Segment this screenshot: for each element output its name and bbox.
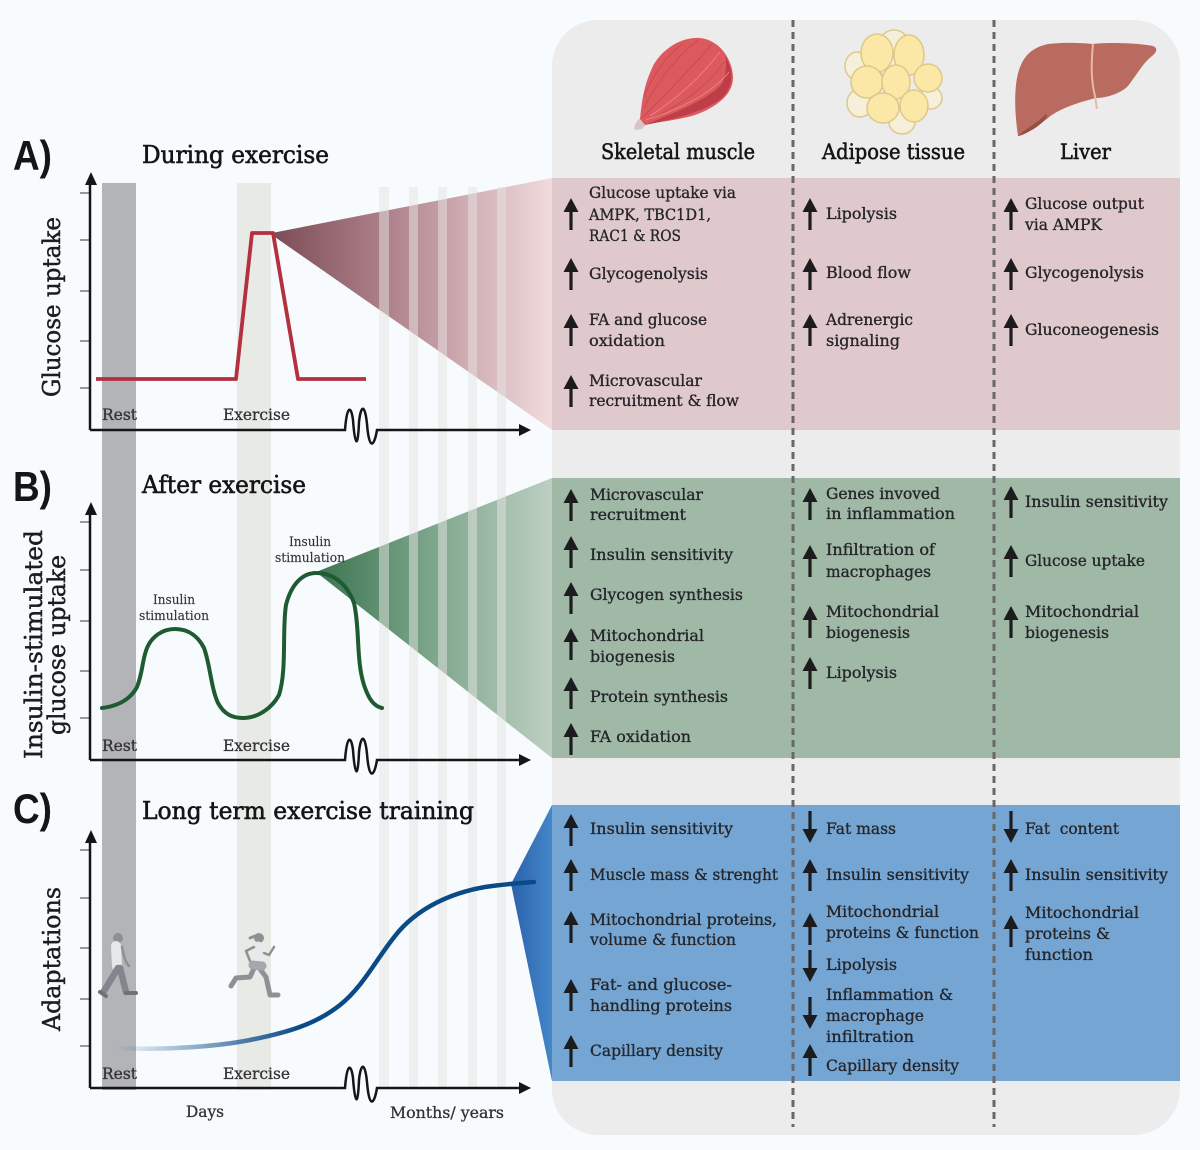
chart B: insulin-stimulated glucose uptake: glucose uptake xyxy=(43,555,71,735)
panel: long term, skeletal muscle: Insulin sensitivity xyxy=(590,819,733,838)
zoom cone: long term training xyxy=(511,805,552,1081)
panel: after exercise, liver: biogenesis xyxy=(1025,623,1109,642)
panel: tissue table background xyxy=(552,20,1180,1135)
panel: long term, skeletal muscle: Muscle mass & strenght xyxy=(590,865,779,884)
panel: during exercise, skeletal muscle: RAC1 & ROS xyxy=(589,226,681,245)
panel: during exercise, liver xyxy=(1004,194,1159,346)
panel: during exercise, adipose tissue: Adrenergic xyxy=(825,310,913,329)
chart B: insulin-stimulated glucose uptake: Insulin-stimulated xyxy=(20,530,48,759)
panel: after exercise, skeletal muscle: Mitochondrial xyxy=(590,626,704,645)
panel: during exercise, adipose tissue: Lipolysis xyxy=(826,204,897,223)
panel: after exercise, skeletal muscle xyxy=(564,485,743,755)
icon: adipose tissue xyxy=(845,30,942,134)
panel: during exercise, skeletal muscle: recruitment & flow xyxy=(589,391,739,410)
zoom cone: during exercise xyxy=(272,178,552,430)
exercise column xyxy=(237,183,271,1090)
panel: during exercise, liver: Gluconeogenesis xyxy=(1025,320,1159,339)
panel letter B: B) xyxy=(13,463,52,510)
panel: during exercise, skeletal muscle: Microvascular xyxy=(589,371,702,390)
title: during exercise: During exercise xyxy=(142,141,329,169)
panel: after exercise, adipose tissue: Infiltration of xyxy=(826,540,936,559)
icon: running person xyxy=(231,933,278,995)
panel: during exercise, skeletal muscle: AMPK, TBC1D1, xyxy=(588,205,711,224)
panel: long term, skeletal muscle: Capillary density xyxy=(590,1041,723,1060)
panel: during exercise, adipose tissue: Blood flow xyxy=(826,263,911,282)
band: during exercise xyxy=(552,178,1180,430)
panel: during exercise, adipose tissue xyxy=(802,198,913,350)
heading: skeletal muscle: Skeletal muscle xyxy=(601,140,755,164)
chart C: adaptations over time: Adaptations xyxy=(38,887,66,1032)
panel: long term, skeletal muscle xyxy=(564,814,779,1067)
panel: after exercise, adipose tissue: Lipolysis xyxy=(826,663,897,682)
icon: walking person xyxy=(100,933,136,996)
chart A: glucose uptake during exercise: Rest xyxy=(102,405,138,424)
chart C: adaptations over time xyxy=(38,830,534,1122)
panel: after exercise, skeletal muscle: Insulin sensitivity xyxy=(590,545,733,564)
panel: during exercise, skeletal muscle: oxidation xyxy=(589,331,665,350)
chart B: insulin-stimulated glucose uptake xyxy=(20,502,531,774)
panel: after exercise, adipose tissue xyxy=(802,484,955,689)
title: after exercise: After exercise xyxy=(141,471,306,499)
title: long term exercise training: Long term exercise training xyxy=(142,797,474,825)
panel: during exercise, skeletal muscle xyxy=(564,183,739,410)
chart A: glucose uptake during exercise: Glucose uptake xyxy=(38,217,66,397)
chart B: insulin-stimulated glucose uptake: stimulation xyxy=(139,609,210,624)
chart C: adaptations over time: Exercise xyxy=(223,1064,290,1083)
panel: during exercise, adipose tissue: signaling xyxy=(826,331,900,350)
panel: long term, liver: Fat content xyxy=(1025,819,1120,838)
chart B: insulin-stimulated glucose uptake: Exercise xyxy=(223,736,290,755)
chart B: insulin-stimulated glucose uptake: stimulation xyxy=(275,551,346,566)
panel letter A: A) xyxy=(13,132,52,179)
chart B: insulin-stimulated glucose uptake: Rest xyxy=(102,736,138,755)
zoom cone: after exercise xyxy=(316,478,552,758)
panel: long term, adipose tissue xyxy=(802,811,979,1076)
panel: after exercise, adipose tissue: macrophages xyxy=(826,562,931,581)
panel: after exercise, skeletal muscle: recruitment xyxy=(590,505,687,524)
panel: after exercise, liver xyxy=(1004,486,1168,642)
panel: after exercise, adipose tissue: Genes invoved xyxy=(826,484,940,503)
panel: during exercise, skeletal muscle: Glucose uptake via xyxy=(589,183,736,202)
icon: skeletal muscle xyxy=(634,38,733,130)
column dividers xyxy=(793,20,994,1127)
band: after exercise xyxy=(552,478,1180,758)
chart A: glucose uptake during exercise: Exercise xyxy=(223,405,290,424)
panel: after exercise, liver: Insulin sensitivity xyxy=(1025,492,1168,511)
panel: long term, skeletal muscle: Mitochondrial proteins, xyxy=(590,910,777,929)
heading: adipose tissue: Adipose tissue xyxy=(821,140,965,164)
panel: long term, adipose tissue: Capillary density xyxy=(826,1056,959,1075)
panel: during exercise, liver: Glucose output xyxy=(1025,194,1145,213)
chart C: adaptations over time: Days xyxy=(186,1102,224,1121)
panel: after exercise, liver: Mitochondrial xyxy=(1025,602,1139,621)
panel: during exercise, skeletal muscle: Glycogenolysis xyxy=(589,264,708,283)
panel: long term, liver xyxy=(1004,811,1168,964)
panel: long term, adipose tissue: macrophage xyxy=(826,1006,924,1025)
panel: long term, adipose tissue: Inflammation & xyxy=(826,985,953,1004)
panel: after exercise, skeletal muscle: FA oxidation xyxy=(590,727,691,746)
panel: after exercise, skeletal muscle: biogenesis xyxy=(590,647,675,666)
panel: long term, liver: proteins & xyxy=(1025,924,1110,943)
panel: long term, skeletal muscle: handling proteins xyxy=(590,996,732,1015)
band: long term training xyxy=(552,805,1180,1081)
panel: long term, adipose tissue: Mitochondrial xyxy=(826,902,939,921)
panel: long term, adipose tissue: Fat mass xyxy=(826,819,896,838)
icon: liver xyxy=(1015,43,1156,136)
long term stripes xyxy=(379,187,506,1087)
panel: during exercise, liver: Glycogenolysis xyxy=(1025,263,1144,282)
panel: long term, adipose tissue: Insulin sensitivity xyxy=(826,865,969,884)
panel: after exercise, adipose tissue: biogenesis xyxy=(826,623,910,642)
panel: after exercise, liver: Glucose uptake xyxy=(1025,551,1145,570)
panel: after exercise, skeletal muscle: Microvascular xyxy=(590,485,703,504)
panel: long term, adipose tissue: Lipolysis xyxy=(826,955,897,974)
panel: after exercise, adipose tissue: in inflammation xyxy=(826,504,955,523)
rest column xyxy=(102,183,136,1090)
chart C: adaptations over time: Months/ years xyxy=(390,1103,504,1122)
panel: long term, adipose tissue: infiltration xyxy=(826,1027,914,1046)
panel: long term, liver: Mitochondrial xyxy=(1025,903,1139,922)
panel: after exercise, adipose tissue: Mitochondrial xyxy=(826,602,939,621)
chart A: glucose uptake during exercise xyxy=(38,172,531,444)
panel: long term, skeletal muscle: Fat- and glucose- xyxy=(590,975,732,994)
heading: liver: Liver xyxy=(1060,140,1112,164)
panel: after exercise, skeletal muscle: Protein synthesis xyxy=(590,687,728,706)
panel: long term, liver: Insulin sensitivity xyxy=(1025,865,1168,884)
chart C: adaptations over time: Rest xyxy=(102,1064,138,1083)
panel: during exercise, skeletal muscle: FA and glucose xyxy=(589,310,707,329)
panel: during exercise, liver: via AMPK xyxy=(1024,215,1103,234)
panel: long term, skeletal muscle: volume & function xyxy=(589,930,736,949)
panel: long term, adipose tissue: proteins & function xyxy=(826,923,979,942)
chart B: insulin-stimulated glucose uptake: Insulin xyxy=(289,535,332,550)
panel: after exercise, skeletal muscle: Glycogen synthesis xyxy=(590,585,743,604)
chart B: insulin-stimulated glucose uptake: Insulin xyxy=(153,593,196,608)
panel letter C: C) xyxy=(13,785,52,832)
panel: long term, liver: function xyxy=(1025,945,1093,964)
